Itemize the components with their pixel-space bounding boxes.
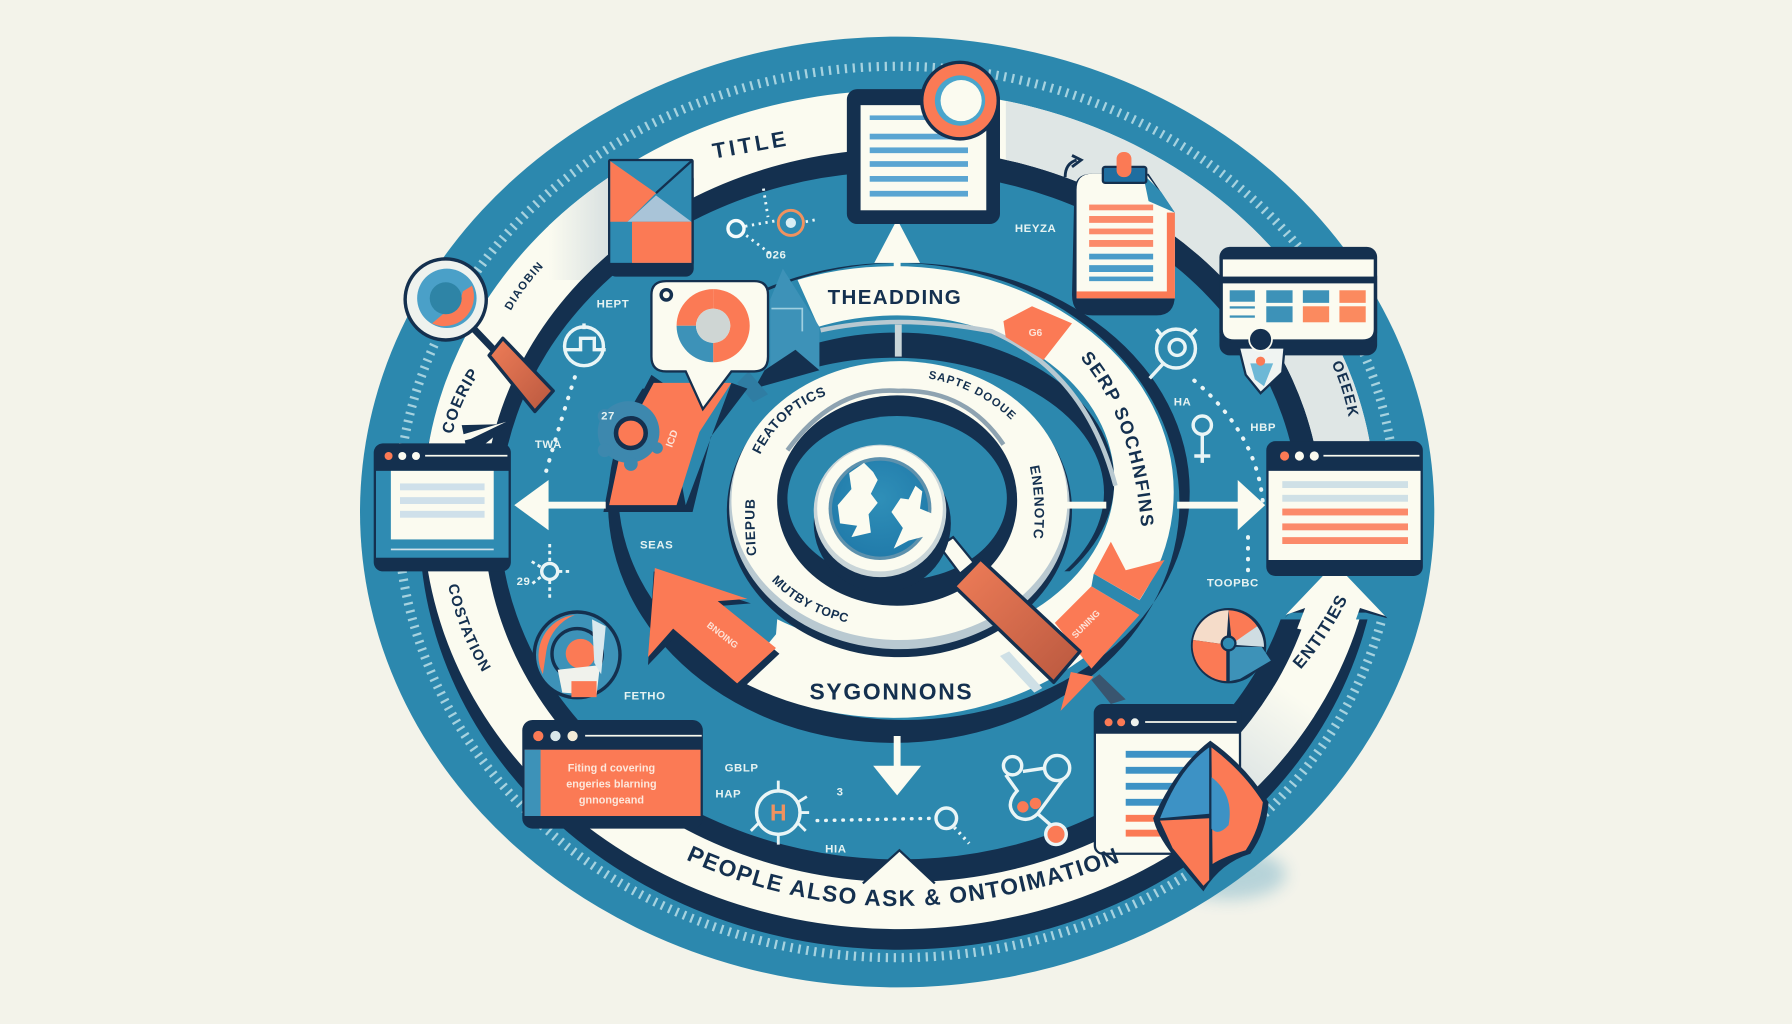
browser caption: gnnongeand: [579, 794, 644, 806]
top document card: [847, 61, 1000, 224]
network node icon: [1003, 755, 1070, 845]
browser caption: engeries blarning: [566, 778, 657, 790]
h node icon: [751, 781, 809, 845]
outer ring label: entities: ENTITIES: [1292, 596, 1346, 669]
orange arrow lower left: BNOING: [705, 620, 740, 650]
orange tab: g6: [1003, 306, 1072, 360]
orange tab: g6: G6: [1029, 328, 1043, 339]
gear icon: [598, 401, 663, 471]
third ring inner navy: [777, 395, 1017, 606]
shield: [1153, 741, 1269, 891]
third ring label: sapte: SAPTE DOOUE: [928, 371, 1016, 420]
outer ring label: coerip: COERIP: [442, 369, 476, 433]
arrow up: [874, 219, 920, 272]
vertical connector top: [895, 325, 902, 357]
blue separator between orange tabs: [1091, 574, 1143, 615]
map shapes in lens: [838, 463, 934, 549]
outer ring: grey upper right segment: [1006, 100, 1370, 441]
orange segment left: [603, 375, 747, 512]
second ring: grey highlight: [821, 322, 1115, 486]
round badge icon lower left: [533, 610, 622, 699]
outer ring: cream band: [423, 90, 1376, 929]
table window: [1219, 247, 1377, 355]
orange segment left: ICD: [664, 429, 681, 449]
small labels: 3: [837, 786, 843, 798]
upper left magnifier: [403, 257, 553, 411]
blue arrow behind bubble: [737, 269, 819, 402]
arrow right: [1177, 480, 1265, 530]
outer ring: grey upper left fade: [548, 178, 608, 280]
infographic: concentric search topic circle: [360, 36, 1434, 988]
orange tab: lower right: [1055, 586, 1139, 669]
third ring base: [727, 365, 1072, 657]
sync icon: [565, 323, 606, 366]
arrow down: [873, 736, 921, 795]
third ring chevron arc: [787, 391, 1003, 450]
small labels: SEAS: [640, 540, 673, 552]
small labels: 27: [601, 410, 615, 422]
target icon: [1150, 329, 1197, 378]
entities arrow on outer ring: [1266, 560, 1401, 640]
outer ring: grey lower right fade: [1241, 686, 1314, 786]
browser caption: Fiting d covering: [568, 762, 655, 774]
orange tab: lower right: SUNING: [1070, 608, 1102, 640]
third ring label: ciepub: CIEPUB: [745, 500, 756, 556]
small labels: GBLP: [725, 762, 759, 774]
second ring: navy base: [608, 263, 1190, 743]
second ring: inner navy crescent: [819, 332, 1114, 572]
small labels: HA: [1174, 397, 1191, 409]
dotted path to small circle: [817, 818, 935, 821]
third ring grey lip: [729, 363, 1070, 649]
pie chart icon: [1191, 608, 1271, 683]
third ring cream: [731, 361, 1067, 640]
arrow left: [514, 480, 606, 530]
orange arrow lower left: [648, 568, 779, 690]
star node icon left: [529, 544, 571, 600]
bottom right browser window: [1095, 705, 1240, 854]
outer ring label: title: TITLE: [710, 125, 791, 164]
second ring label: theadding: THEADDING: [828, 286, 962, 309]
second ring label: synonyms: SYGONNONS: [809, 678, 973, 704]
clipboard: [1072, 152, 1175, 315]
small curled arrow above clipboard: [1065, 155, 1081, 177]
speech bubble with donut: [651, 281, 768, 409]
small circle node bottom: [936, 808, 969, 843]
orange tab: right: [1094, 542, 1165, 600]
small labels: HEPT: [597, 298, 629, 310]
small labels: FETHO: [624, 690, 666, 702]
horizontal connector inside: [1061, 502, 1106, 509]
bottom ring notch arrow: [863, 850, 935, 883]
bottom left browser window: [522, 720, 703, 829]
small labels: HIA: [825, 844, 847, 856]
person icon: [1239, 328, 1285, 393]
small labels: 29: [517, 576, 530, 588]
outer disc shadow: [1171, 849, 1286, 899]
outer blue disc: [360, 37, 1434, 987]
small labels: HBP: [1250, 422, 1276, 434]
top left folded square icon: [608, 159, 694, 277]
outer ring label: diagram: DIAOBIN: [504, 262, 543, 310]
pin icon: [1193, 416, 1211, 463]
small labels: TWA: [535, 439, 562, 451]
second ring: cream band: [746, 266, 1174, 718]
outer ring label: continuation: COSTATION: [448, 584, 491, 672]
small labels: 026: [766, 249, 786, 261]
small labels: HEYZA: [1015, 223, 1056, 235]
outer ring label: people also ask: PEOPLE ALSO ASK & ONTOIMATION: [687, 846, 1119, 906]
h node icon: H: [770, 800, 787, 826]
dotted path lower right: [1246, 537, 1250, 571]
magnifier handle: [939, 537, 1126, 711]
arrowhead of outer ring, left: [434, 422, 510, 448]
central magnifier lens: [814, 445, 951, 592]
third ring label: enenotc: ENENOTC: [1030, 465, 1044, 538]
outer ring: navy base: [419, 102, 1379, 950]
tick ring: [398, 66, 1397, 958]
third ring inner blue: [787, 416, 1007, 581]
dotted path left: [546, 377, 575, 471]
dotted path right: [1194, 381, 1263, 503]
small labels: TOOPBC: [1207, 577, 1259, 589]
second ring label: serp: SERP SOCHNFINS: [1082, 352, 1154, 526]
outer ring label: oeeek: OEEEK: [1333, 361, 1358, 417]
small labels: HAP: [715, 789, 741, 801]
right browser window: [1266, 441, 1423, 576]
small labels: [517, 223, 1276, 856]
top circular badge: [920, 61, 1000, 141]
second ring: grey crescent lower right: [1000, 651, 1042, 693]
small node cluster top: [728, 189, 817, 257]
third ring label: features: FEATOPTICS: [752, 388, 826, 454]
third ring label: mutby topc: MUTBY TOPC: [772, 575, 848, 622]
left browser window: [374, 443, 511, 571]
